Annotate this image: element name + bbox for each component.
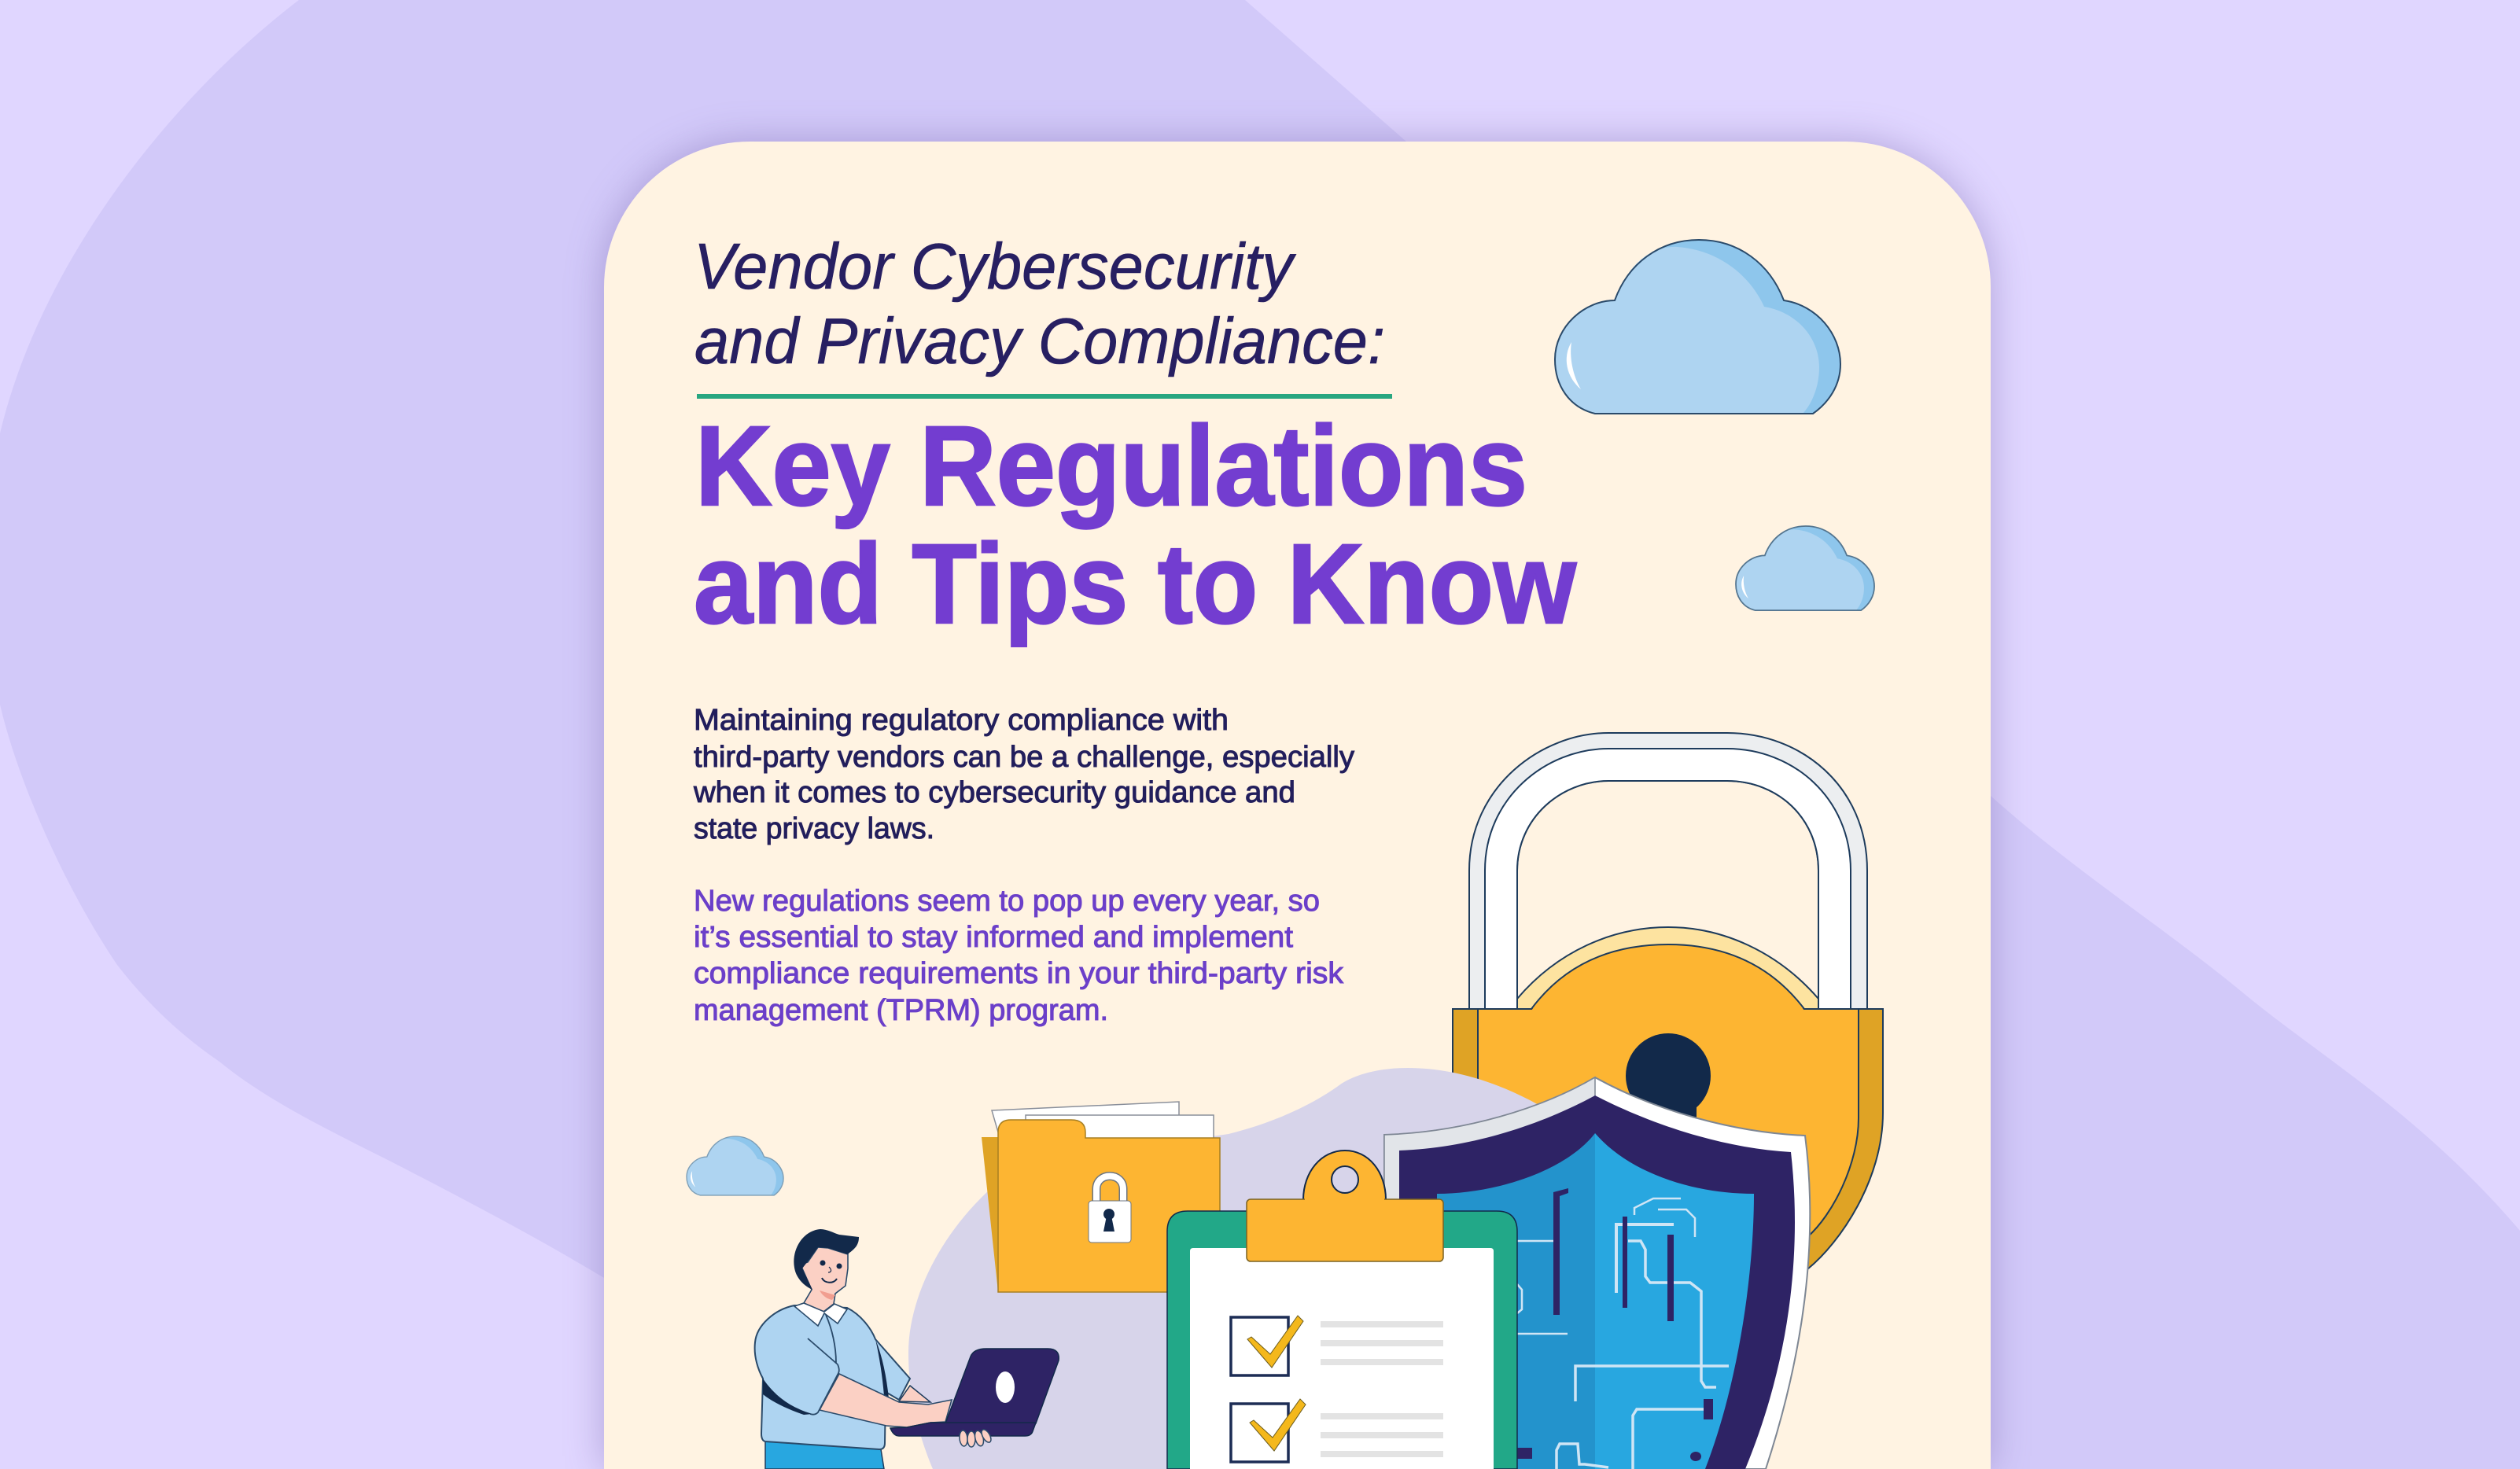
person sleeve edge (810, 1364, 839, 1415)
person forearm (820, 1374, 952, 1427)
person fingers (959, 1428, 993, 1447)
heading: subtitle: Vendor Cybersecurity (694, 230, 1296, 303)
text block: purple paragraph: New regulations seem to pop up every year, so (694, 885, 1320, 918)
checklist item 2 (1231, 1399, 1443, 1462)
text block: purple paragraph (694, 885, 1344, 1027)
shield navy border (1399, 1095, 1795, 1469)
person rear arm (899, 1386, 930, 1402)
icon: small cloud (687, 1136, 783, 1195)
clipboard clip (1247, 1151, 1443, 1261)
heading: subtitle (694, 230, 1385, 377)
shield blue face (1437, 1133, 1754, 1469)
folder papers (992, 1102, 1214, 1142)
icon: clipboard checklist (1167, 1151, 1517, 1469)
text block: purple paragraph: management (TPRM) program. (694, 994, 1108, 1027)
panel: card (604, 142, 1991, 1469)
icon: medium cloud (1736, 526, 1874, 610)
laptop (890, 1349, 1059, 1436)
heading: main title: Key Regulations (695, 403, 1527, 529)
divider rule (697, 394, 1392, 399)
text block: intro paragraph: state privacy laws. (694, 812, 934, 845)
padlock keyhole (1626, 1033, 1711, 1140)
lavender blob behind illustrations (908, 1068, 1546, 1469)
person shirt (755, 1305, 910, 1449)
person trousers (765, 1441, 884, 1469)
padlock dome (1517, 927, 1818, 1011)
icon: large cloud (1555, 240, 1840, 414)
checklist item 1 (1231, 1316, 1443, 1375)
shield navy marks (1517, 1188, 1713, 1461)
heading: subtitle: and Privacy Compliance: (694, 304, 1385, 377)
text block: intro paragraph: Maintaining regulatory compliance with (694, 704, 1229, 737)
person neck and face (801, 1247, 848, 1312)
text block: purple paragraph: compliance requirements in your third-party risk (694, 957, 1344, 990)
clipboard board (1167, 1211, 1517, 1469)
text block: intro paragraph: when it comes to cybersecurity guidance and (693, 776, 1295, 809)
folder front (998, 1120, 1220, 1292)
icon: shield (1384, 1077, 1810, 1469)
person bag strap (763, 1339, 889, 1415)
text block: purple paragraph: it’s essential to stay informed and implement (694, 921, 1293, 954)
icon: folder with padlock (982, 1102, 1220, 1292)
text block: intro paragraph (693, 704, 1354, 845)
person collar (794, 1303, 847, 1326)
clipboard paper (1190, 1248, 1494, 1469)
shield circuit lines (1517, 1198, 1729, 1469)
shield outer (1384, 1077, 1810, 1469)
folder padlock (1089, 1176, 1131, 1243)
person facial features (820, 1260, 842, 1283)
padlock body (1453, 944, 1883, 1293)
person hair (794, 1229, 859, 1290)
illustration: person with laptop (755, 1229, 1059, 1469)
person neck shadow (820, 1290, 835, 1300)
person shirt seam (808, 1315, 838, 1364)
icon: large padlock (1453, 733, 1883, 1293)
heading: main title: and Tips to Know (694, 521, 1577, 647)
text block: intro paragraph: third-party vendors can be a challenge, especially (694, 741, 1354, 774)
folder back (982, 1137, 1022, 1292)
heading: main title (694, 403, 1577, 647)
padlock shackle (1469, 733, 1867, 1014)
